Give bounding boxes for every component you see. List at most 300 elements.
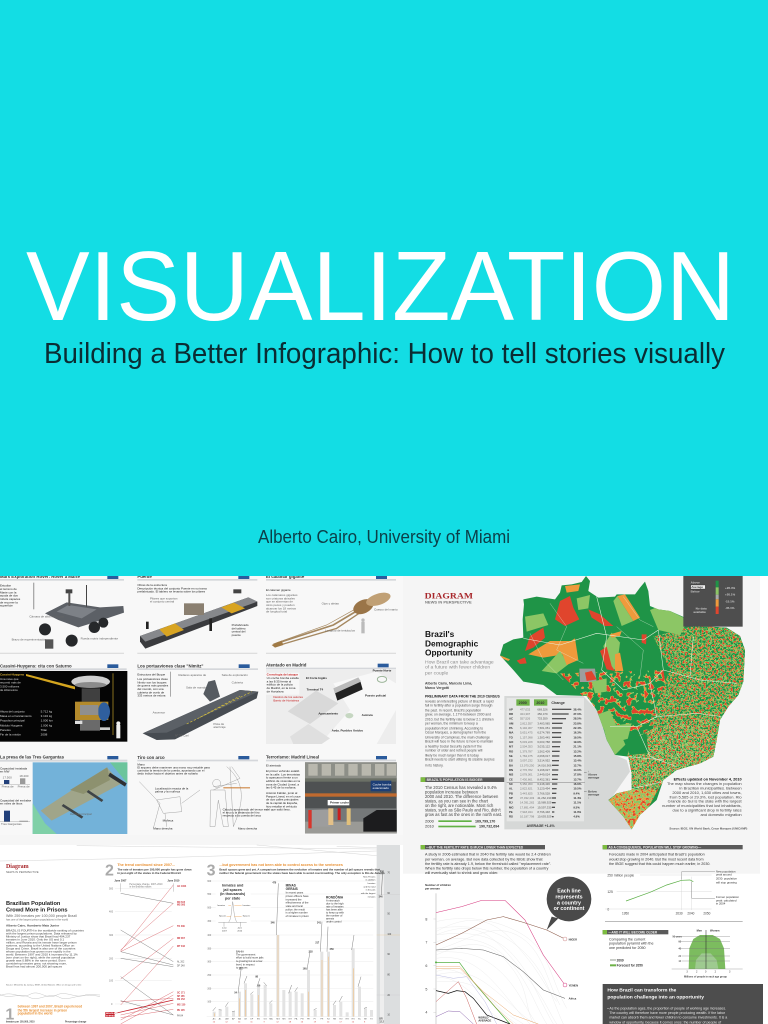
thumbnail: bridge deck: puente [232,633,241,637]
map region: Amazon municipalities [500,584,688,755]
bar chart: inmates vs jail spaces: AM [225,1017,229,1020]
table: population by state: 22.4% [573,726,582,730]
thumbnail: giant squid: son criaturas abisales [266,596,295,600]
thumbnail: Madrid attack map: Un coche bomba estalla [267,676,299,680]
bar chart: inmates vs jail spaces: 470 [272,882,277,885]
table: population by state: MS [509,773,513,777]
section tag 1 [421,777,504,782]
bar chart: inmates vs jail spaces: RS [352,1018,355,1020]
thumbnail: Mars rover: el terreno de [0,587,17,591]
line chart: population forecast: 1950 [622,911,629,915]
thumbnail: archer: Cálculo aproximado del tensor en [223,808,267,812]
table: population by state: RN [509,768,513,772]
bar chart: inmates vs jail spaces: SE [364,1018,367,1020]
table: population by state: 2,068,017 [537,754,550,758]
slope chart: inmates per state: MS 593 [177,904,186,906]
bar chart: inmates vs jail spaces: BA [238,1017,241,1020]
line chart: children per woman: AVERAGE [478,1019,491,1023]
table: population by state: 15.8% [573,754,582,758]
table: population by state: 7,430,661 [520,777,533,781]
text panel: opportunity: How Brazil can transform the [607,988,677,994]
section number 2: 2 [105,863,114,880]
masthead: DIAGRAM: DIAGRAM [425,591,474,600]
thumbnail: giant squid: Longitud de tentáculos [325,629,356,633]
map legend: +20.1% [725,593,736,597]
thumbnail: Madrid street bomb scene: edificio de viviendas en la [266,779,300,783]
thumbnail: Madrid street bomb scene: El primer vehículo estalló [266,769,300,773]
bar chart: inmates vs jail spaces: 11 [250,1021,253,1023]
table: population by state: 13.2% [573,749,582,753]
article text: likely be much larger than it is today. [425,753,479,757]
map region: Rio Grande do Sul [608,781,663,830]
article text: César Marques, a demographer from the [425,731,486,735]
bar chart: inmates vs jail spaces: RO [339,1018,343,1020]
map commentary: and domestic migration [700,812,742,817]
bar chart: inmates vs jail spaces: 346 [271,921,275,924]
thumbnail: Three Gorges dam: Presa de [2,784,14,788]
table: population by state: 19,597,330 [537,805,552,809]
thumbnail: Nimitz aircraft carrier: Cubierta [232,680,243,684]
map legend: +26.4% [725,586,736,590]
thumbnail: Madrid attack map: edificio de la policía [267,683,293,687]
callout: each line represents a country or continent [547,877,591,930]
thumbnail: archer: palma y la muñeca [155,789,180,793]
population pyramid: 40 [678,947,682,950]
right strip chart: Inmates [368,882,375,885]
thumbnail: Cassini-Huygens: 1.000 km [41,719,53,723]
thumbnail: Cassini-Huygens: 3.500 millones [0,684,20,688]
slope chart: inmates per state: MT 342 [177,945,186,948]
section number 3: 3 [207,863,216,880]
article text: world. Between 1997 and 2010 it increased by 11.1% [6,953,78,957]
annotation: Bahia: The government [236,952,256,956]
article text: number of older and retired people will [425,749,483,753]
cue: below average [584,789,600,799]
thumbnail: Nimitz aircraft carrier: Radares aparatos de [178,673,207,677]
thumbnail: Three Gorges dam: Capacidad instalada [0,766,27,770]
thumbnail: Mars rover: Mars Exploration Rover: Rover a Marte [0,574,80,579]
thumbnail: bridge deck: el conjunto central [150,600,175,604]
article text: Brazil needs to start utilizing its sizable surplus [425,758,495,762]
chart inset: inmates and jail spaces: Inmates [243,904,250,907]
table: population by state: SC [509,782,513,786]
thumbnail: bridge deck: del tablero [232,626,246,630]
article text: PRELIMINARY DATA FROM THE 2010 CENSUS [425,695,501,699]
annotation: Minas Gerais: of inmates in prison [286,914,309,918]
table: population by state: 8,452,381 [537,777,550,781]
table: population by state: 9.4% [573,791,580,795]
section background [403,835,760,874]
thumbnail: Madrid street bomb scene: de dos calles principales [266,798,299,802]
annotation: Rondônia: rate of inmates [326,904,344,908]
map legend: -35.1% [725,606,735,610]
table: population by state: RS [509,815,513,819]
article text: grew, on average, 1.17% between 2000 and [425,713,491,717]
bar chart: inmates vs jail spaces: RR [346,1018,349,1020]
section 2 text: The rate of inmates per 100,000 people has gone down [117,868,192,872]
section tag 3: AS A CONSEQUENCE, POPULATION WILL STOP GROWING— [608,846,702,850]
text panel: opportunity: market can absorb them and fewer children to consume investments. It is a [609,1016,727,1020]
population bars: 169,799,170 [475,819,495,823]
table: population by state [504,696,632,829]
table: population by state: 2010 [536,701,544,705]
heading: Brazil's Demographic Opportunity: Brazil's [425,629,455,639]
slope chart: inmates per state: PE 105 [177,1010,185,1012]
table: population by state: 3,097,232 [520,759,533,763]
bar chart: inmates vs jail spaces: 600 [207,881,212,883]
slope chart: inmates per state: in the Brazilian states [129,886,152,889]
population pyramid: 2 [715,971,717,974]
bar chart: inmates vs jail spaces: 200 [207,988,212,990]
census text: The 2010 Census has revealed a 9.4% [425,785,497,790]
thumbnail: archer: Tiro con arco [137,755,165,760]
subheading: of a future with fewer children [425,664,490,670]
bar chart: inmates vs jail spaces: 121 [239,968,243,970]
author: Alberto Cairo, University of Miami [258,527,510,547]
annotation: Rondônia: arrests [326,916,335,920]
bar chart: inmates vs jail spaces: 9 [264,1021,266,1023]
annotation: Minas Gerais: is a higher number [286,911,308,915]
line chart: population forecast: 2030 [676,911,683,915]
table: population by state: 28.5% [573,717,582,721]
pyramid text: Comparing the current [609,937,645,941]
article text: million, and Russia and its inmate have larger prison [6,941,77,945]
bar chart: inmates vs jail spaces: 10 [213,1021,216,1023]
map legend: -15.1% [725,599,735,603]
byline: Marco Vergotti [425,686,449,690]
line chart: population forecast: 250 million people [607,873,634,877]
thumbnail: Three Gorges dam: 18.200 [19,774,29,778]
decorative masthead: Diagram: Diagram [6,864,29,870]
table: population by state: PE [509,810,513,814]
thumbnail: Three Gorges dam: Central principal [70,812,92,816]
table: population by state: 11.4% [573,796,582,800]
table: population by state: 4.9% [573,815,580,819]
table: population by state: 2,822,621 [520,787,533,791]
thumbnail: Madrid street bomb scene: en la calle. Los terroristas [266,772,301,776]
bar chart: inmates vs jail spaces: 14 [327,1021,330,1023]
section 1 text: the 5th largest increase in prison [18,1008,67,1012]
right strip chart: 100 [387,934,392,936]
right strip chart: with the largest [361,892,376,895]
bar chart: inmates vs jail spaces: 12 [276,1021,280,1023]
thumbnail: archer: Muñeca [163,819,174,823]
annotation: Rondônia: the number of [326,913,343,917]
bar chart: inmates vs jail spaces: PI [314,1018,316,1020]
map: population change in Brazil [500,576,747,833]
bar chart: inmates vs jail spaces [207,881,373,1023]
bar chart: inmates vs jail spaces: 300 [207,962,212,964]
thumbnail: Madrid street bomb scene: lo aparcaron frente a un [266,776,298,780]
cue: below average: ↓ [588,795,590,799]
thumbnail: Madrid street bomb scene: Coche bomba [373,782,392,786]
callout: each line represents a country or continent: a country [557,900,581,906]
table: population by state: BA [509,763,513,767]
pyramid legend: Forecast for 2050 [617,964,643,968]
article text: in its history. [425,763,444,767]
table: population by state: ES [509,759,513,763]
table: population by state: 324,397 [520,712,531,716]
table: population by state: AVERAGE +1.4% [527,824,555,828]
cue: above average [584,769,600,779]
article text: population from shrinking. According to [425,726,483,730]
map commentary: 2000 and 2010, 1,630 cities and towns, [672,790,742,795]
thumbnail: Madrid street bomb scene: Primer coche [330,801,349,805]
thumbnail: Madrid attack map: Terminal T4 [307,688,324,692]
table: population by state: 2000 [519,701,527,705]
bar chart: inmates vs jail spaces: AP [232,1017,235,1020]
population text: Forecasts made in 2004 anticipated that Brazil's population [609,853,705,857]
fertility text: per woman, on average. But new data collected by the IBGE show that [425,858,544,862]
thumbnail: Cassini-Huygens: Cassini-Huygens: cita con Saturno [0,663,72,668]
line chart: population forecast: 125 [607,890,613,894]
slope chart: inmates per state: TO 409 [177,925,185,928]
thumbnail: Madrid attack map: de Madrid, en la zona [267,686,296,690]
divider [605,920,743,923]
text panel: opportunity: • As the population ages, the proportion of people of working age increases. [607,1006,726,1010]
table: population by state: 6,574,789 [537,731,550,735]
table: population by state: 450,479 [537,712,548,716]
map commentary: due to a significant drop in fertility rates [673,807,742,812]
bar chart: inmates vs jail spaces: 160 [303,969,307,971]
cue: above average: ↑ [588,769,590,773]
thumbnail: Madrid attack map: Autovía [362,713,373,717]
slope chart: inmates per state: RS 152 [177,999,185,1001]
bar chart: inmates vs jail spaces: 341 [317,921,322,924]
population pyramid: 20 [678,955,682,958]
bar chart: inmates vs jail spaces: MT [289,1018,292,1020]
thumbnail: giant squid [266,574,398,654]
bar chart: inmates vs jail spaces: PA [295,1017,298,1020]
article text: fall in fertility after a population surge through [425,704,492,708]
table: population by state: AL [509,787,513,791]
slope chart: inmates per state: PA 84 [177,1015,184,1018]
thumbnail: archer: Mano derecha [238,826,257,830]
table: population by state: PB [509,791,513,795]
thumbnail: Three Gorges dam: 17.500 [3,775,12,779]
panel: Brazilian population prisons [0,835,405,1024]
table: population by state: 15,989,929 [537,801,552,805]
population pyramid: 10 [678,960,682,963]
table: population by state: 19.5% [573,735,582,739]
line chart: population forecast: peak around [716,873,732,877]
table: population by state: GO [509,740,514,744]
thumbnail: Mars rover: superficie [0,604,13,608]
bar chart: inmates vs jail spaces: TO [370,1018,373,1020]
section 1 table header: Percentage change [65,1021,87,1024]
table: population by state: Change [551,701,565,705]
table: population by state: RJ [509,801,513,805]
thumbnail: Madrid street bomb scene: estacionado [373,786,389,790]
annotation: Rondônia: RONDÔNIA [326,894,344,899]
slope chart: inmates per state: 0 [111,1003,113,1006]
table: population by state: 669,526 [537,707,548,711]
thumbnail: Three Gorges dam: en miles de litros [0,802,23,806]
table: population by state: 19.9% [573,740,582,744]
slope chart: inmates per state: 200 [109,957,114,960]
line chart: population forecast: peak: calculated [716,898,737,902]
thumbnail: giant squid: Cuerpo del manto [374,608,398,612]
article text: University of Campinas, the main challenge [425,735,490,739]
thumbnail: archer: el arco y la distancia del tiro [223,811,260,815]
population pyramid [672,929,743,979]
chart inset: inmates and jail spaces: Inmates [217,904,225,907]
bar chart: inmates vs jail spaces: 250 [207,975,212,977]
table: population by state: 14,391,282 [520,801,535,805]
byline: Alberto Cairo, Marcelo Lima, [425,682,472,686]
cue: above average: average [588,775,600,779]
article text: whose population has grown more rapidly in the [6,950,71,954]
line chart: children per woman: 5 [425,987,427,991]
thumbnail: Madrid street bomb scene: del que salió ileso. [266,808,291,812]
thumbnail: Madrid attack map: Cronología del ataque [267,672,298,676]
heading: Brazil's Demographic Opportunity: Opportunity [425,647,473,657]
slope chart: inmates per state: BRAZILIAN [106,1012,118,1015]
thumbnail: bridge deck: Obras de la estructura [137,583,167,587]
pyramid text: one predicted for 2050 [609,946,646,950]
slope chart: inmates per state: 100 [109,980,114,983]
table: population by state: 1,383,445 [537,735,550,739]
line chart: population forecast [605,870,739,915]
slope chart: inmates per state: MG 130 [177,1005,186,1007]
table: population by state: 13.4% [573,759,582,763]
thumbnail: Mars rover: Brazo de experimentación [12,638,47,642]
section 1 text: between 1997 and 2007, Brazil experienced [18,1005,82,1009]
thumbnail: Cassini-Huygens: Cassini-Huygens [0,673,25,677]
thumbnail: Cassini-Huygens: 5.712 kg [41,709,52,713]
thumbnail: Nimitz aircraft carrier: Nimitz son los buques [137,680,167,684]
line chart: population forecast: 2040 [687,911,695,915]
right strip chart: 346 [379,896,383,899]
thumbnail: Madrid street bomb scene: Antonio Fabián, junto al [266,791,298,795]
annotation: Minas Gerais: prison officers have [286,894,309,898]
thumbnail: bridge deck: prefabricado. El tablero se levanta sobre los pilares [137,589,206,593]
right strip chart: 60 [387,893,391,895]
line chart: children per woman: 7 [425,941,427,945]
thumbnail: bridge deck [137,574,257,654]
bar chart: inmates vs jail spaces: PR [320,1018,324,1020]
section tag 4: —AND IT WILL BECOME OLDER [608,931,658,935]
bar chart: inmates vs jail spaces: GO [264,1018,267,1020]
bar chart: inmates vs jail spaces: CE [244,1018,248,1020]
table: population by state: 3,168,027 [537,768,550,772]
table: population by state: 10,187,798 [520,815,535,819]
bar chart: inmates vs jail spaces: 14 [238,1021,241,1023]
thumbnail: Madrid attack map: Aparcamiento [318,712,338,716]
section 2 text: in just eight of the states in the Federal District [117,871,181,875]
population bars: 2010 [425,824,435,829]
line chart: children per woman: NIGER [569,937,577,941]
section tag 2 [421,845,545,850]
thumbnail: giant squid: El calamar gigante [266,574,305,579]
thumbnail: Madrid street bomb scene: zona de Ciudad Lineal, a [266,782,299,786]
masthead: DIAGRAM: NEWS IN PERSPECTIVE [425,601,473,605]
title panel background [0,0,768,576]
slope chart: inmates per state [105,880,187,1024]
thumbnail: bridge deck: central del [232,630,246,634]
table: population by state: 11.0% [573,810,582,814]
thumbnail: Cassini-Huygens: de kilómetros [0,688,18,692]
line chart: population forecast: 2030: population [716,876,737,880]
fertility text: the fertility rate is already 1.9, below the threshold called "replacement rate". [425,862,551,866]
map commentary: from 5,565 or 29.3%, lost population. Rio [669,794,742,799]
bar chart: inmates vs jail spaces: 54 [234,992,238,995]
population text: the IBGE suggest that this could happen much earlier, in 2030. [609,862,710,866]
thumbnail: archer [137,755,267,830]
bar chart: inmates vs jail spaces: 350 [207,948,212,950]
bar chart: inmates vs jail spaces: 550 [207,894,212,896]
table: population by state: MG [509,805,514,809]
thumbnail: Nimitz aircraft carrier: Pista de [213,722,224,726]
table: population by state: 10,693,929 [537,815,552,819]
thumbnail: Madrid street bomb scene: Terrorismo: Madrid Lineal [266,755,319,760]
section 1 text: population in the world [18,1012,52,1016]
bar chart: inmates vs jail spaces: 18 [289,1021,292,1023]
annotation: Minas Gerais: In recent years [286,891,304,895]
table: population by state: RO [509,749,514,753]
thumbnail: giant squid: Ojos y aletas [322,601,339,605]
article text: (see chart on the right), while the overall population [6,956,75,960]
bar chart: inmates vs jail spaces: MS [282,1018,286,1020]
table: population by state: 1,157,098 [520,735,533,739]
population pyramid: 3 [729,971,731,974]
map: state borders [523,590,737,792]
table: population by state: 37.0% [573,712,582,716]
article text: 2010, but the fertility rate is below 2.1 children [425,717,494,721]
thumbnail: Cassini-Huygens [0,663,127,742]
table: population by state: 7,581,051 [537,726,550,730]
bar chart: inmates vs jail spaces: RN [333,1018,337,1020]
bar chart: inmates vs jail spaces: 500 [207,908,212,910]
table: population by state: 3,514,952 [537,759,550,763]
line chart: population forecast: 2050 [703,911,711,915]
section 3 heading: ...but government has not been able to control access to the sentences [219,863,343,867]
annotation: Bahia: level, in respect [236,962,255,966]
table: population by state: RR [509,712,513,716]
table: population by state: 3,120,494 [537,787,550,791]
pyramid legend [610,958,643,968]
subtitle: Building a Better Infographic: How to tell stories visually [44,338,726,370]
slope chart: inmates per state: 400 [109,910,114,913]
chart inset: inmates and jail spaces: Spaces [219,916,226,918]
map commentary: in Brazilian municipalities. Between [679,785,742,790]
article text: Ministry of Justice show that Brazil had 494,237 [6,935,71,939]
panel: Brazil's Demographic Opportunity [403,570,760,835]
article text: a healthy Social Security system if the [425,744,482,748]
chart inset: inmates and jail spaces: June [237,928,243,930]
line chart: population forecast: 0 [607,907,609,911]
thumbnail: Mars rover: robots capaces [0,597,21,601]
table: population by state: MA [509,731,513,735]
table: population by state: 12.7% [573,763,582,767]
callout: each line represents a country or continent: or continent [554,906,585,912]
thumbnail: Madrid street bomb scene: El atentado [266,764,281,768]
cue: below average: average [588,792,600,796]
thumbnail: Madrid street bomb scene: Parque Lineal, en el cruce [266,794,301,798]
line chart: population forecast: Former population [716,895,739,899]
census text: population increase between [425,789,479,794]
table: population by state: 1,784,475 [520,754,533,758]
section 3 text: Brazil spaces grew and yet. A comparison between the evolution of inmates and the number of jail spaces reveals that, [219,868,381,872]
line chart: children per woman: Number of children [425,883,451,887]
heading: Brazilian population: Crowd More in Prisons [6,907,68,913]
map region: central mosaic [560,670,670,733]
thumbnail: Nimitz aircraft carrier: cubierta de vuelo de [137,690,165,694]
bar chart: inmates vs jail spaces: 217 [315,942,320,944]
census text: grow as fast as the ones in the north east. [425,812,502,817]
annotation: Minas Gerais: MINAS [286,884,296,888]
pyramid text: population pyramid with the [609,942,654,946]
